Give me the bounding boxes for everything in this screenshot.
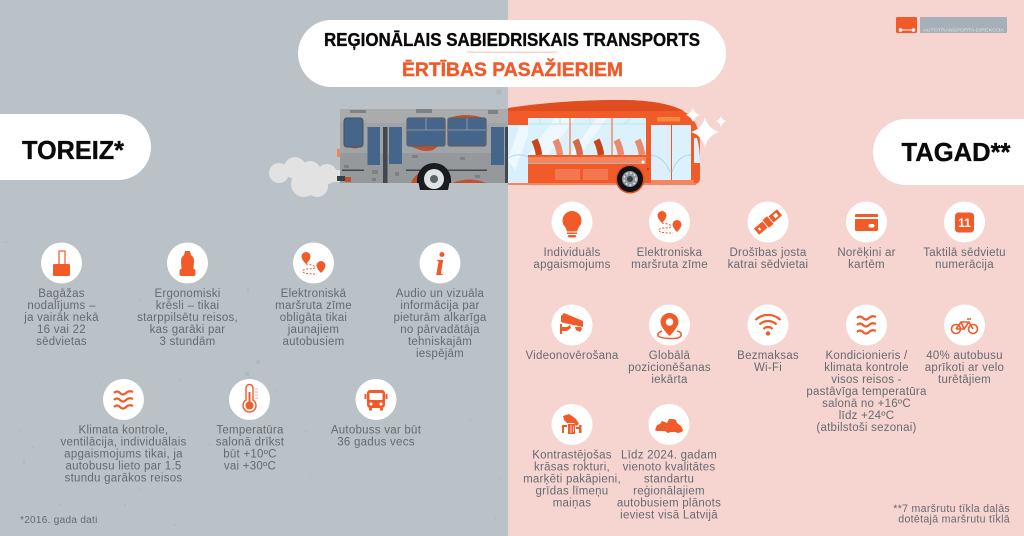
icon: waves bbox=[857, 316, 876, 334]
seats bbox=[534, 140, 642, 155]
item: ergonomic seats: kas garāki par bbox=[150, 324, 225, 336]
item: luggage compartment: sēdvietas bbox=[36, 336, 87, 348]
item: contrast handles: krāsas rokturi, bbox=[534, 462, 610, 474]
item: individual lighting: Individuāls bbox=[543, 247, 601, 259]
item: climate control, past: Klimata kontrole, bbox=[79, 424, 168, 436]
item: air conditioning: līdz +24ºC bbox=[839, 410, 894, 422]
item: climate control, past bbox=[60, 379, 187, 484]
item: electronic route sign, now bbox=[631, 202, 708, 271]
icon: bicycle bbox=[952, 319, 978, 334]
item: Latvia quality standard: ieviest visā Latvijā bbox=[620, 510, 718, 522]
item: audio and visual info: pieturām alkarīga bbox=[393, 312, 487, 324]
item: tactile seat numbering bbox=[923, 202, 1006, 271]
icon: number badge: 11 bbox=[958, 216, 971, 230]
item: video surveillance: Videonovērošana bbox=[525, 350, 619, 362]
item: air conditioning bbox=[806, 304, 927, 434]
item: temperature: vai +30ºC bbox=[224, 460, 276, 472]
icon: info: i bbox=[435, 247, 445, 283]
icon: waves bbox=[114, 391, 133, 408]
icon: bus bbox=[364, 390, 388, 410]
item: electronic route sign, past: autobusiem bbox=[283, 336, 344, 348]
heading pill: TAGAD bbox=[873, 119, 1024, 185]
logo: AUTOTRANSPORTA DIREKCIJA bbox=[923, 28, 1004, 32]
item: video surveillance bbox=[525, 304, 619, 362]
icon: Latvia map bbox=[655, 419, 683, 433]
item: GPS device: Globālā bbox=[649, 350, 690, 362]
item: electronic route sign, now: Elektroniska bbox=[637, 247, 702, 259]
item: luggage compartment: 16 vai 22 bbox=[37, 324, 86, 336]
item: air conditioning: Kondicionieris / bbox=[826, 350, 907, 362]
item: GPS device bbox=[628, 304, 711, 386]
item: Latvia quality standard: Līdz 2024. gadam bbox=[621, 450, 717, 462]
item: temperature: salonā drīkst bbox=[216, 436, 285, 448]
icon: wifi bbox=[756, 315, 780, 336]
item: temperature bbox=[216, 379, 285, 472]
item: audio and visual info: tehniskajām bbox=[408, 336, 472, 348]
icon: bulb bbox=[562, 211, 582, 238]
item: climate control, past: autobusu lieto par 1.5 bbox=[65, 460, 182, 472]
sparkles bbox=[686, 108, 726, 148]
item: individual lighting: apgaismojums bbox=[533, 259, 611, 271]
item: temperature: Temperatūra bbox=[216, 424, 284, 436]
item: bike holders: aprīkoti ar velo bbox=[925, 362, 1004, 374]
icon: card bbox=[855, 214, 878, 231]
item: contrast handles: maiņas bbox=[553, 498, 591, 510]
old grey bus bbox=[337, 109, 508, 190]
item: tactile seat numbering: Taktilā sēdvietu bbox=[923, 247, 1006, 259]
new orange bus bbox=[508, 100, 700, 194]
item: bus age bbox=[331, 379, 422, 448]
item: individual lighting bbox=[533, 202, 611, 271]
item: bike holders bbox=[925, 304, 1004, 386]
item: card payments: Norēķini ar bbox=[837, 247, 896, 259]
icon: route pins bbox=[658, 211, 682, 233]
item: card payments bbox=[837, 202, 896, 271]
item: ergonomic seats: starppilsētu reisos, bbox=[137, 312, 238, 324]
item: contrast handles: marķēti pakāpieni, bbox=[523, 474, 621, 486]
item: GPS device: pozicionēšanas bbox=[628, 362, 711, 374]
panel: right background bbox=[508, 0, 1024, 536]
item: air conditioning: klimata kontrole bbox=[824, 362, 909, 374]
item: air conditioning: pastāvīga temperatūra bbox=[806, 386, 927, 398]
item: bus age: 36 gadus vecs bbox=[337, 436, 415, 448]
footnote: route network: dotētajā maršrutu tīklā bbox=[898, 514, 1010, 526]
exhaust cloud bbox=[269, 157, 340, 197]
logo bbox=[896, 17, 1007, 33]
item: electronic route sign, past: obligāta tikai bbox=[280, 312, 347, 324]
item: climate control, past: ventilācija, individuālais bbox=[60, 436, 187, 448]
item: air conditioning: (atbilstoši sezonai) bbox=[816, 422, 917, 434]
item: electronic route sign, past: maršruta zīme bbox=[275, 300, 352, 312]
item: contrast handles bbox=[523, 404, 621, 510]
icon: suitcase bbox=[53, 251, 70, 276]
item: bike holders: 40% autobusu bbox=[926, 350, 1003, 362]
item: audio and visual info bbox=[393, 242, 487, 360]
item: seat belt: katrai sēdvietai bbox=[728, 259, 808, 271]
item: air conditioning: salonā no +16ºC bbox=[822, 398, 911, 410]
item: bike holders: turētājiem bbox=[938, 374, 991, 386]
item: ergonomic seats bbox=[137, 242, 238, 348]
item: ergonomic seats: Ergonomiski bbox=[154, 288, 221, 300]
item: luggage compartment: ja vairāk nekā bbox=[23, 312, 99, 324]
heading pill: TOREIZ: TOREIZ* bbox=[22, 135, 125, 165]
title: REĢIONĀLAIS SABIEDRISKAIS TRANSPORTS bbox=[324, 30, 700, 50]
item: seat belt: Drošības josta bbox=[729, 247, 807, 259]
footnote: 2016 data: *2016. gada dati bbox=[20, 515, 98, 526]
item: electronic route sign, now: maršruta zīme bbox=[631, 259, 708, 271]
item: free Wi-Fi bbox=[737, 304, 799, 374]
item: luggage compartment: nodalījums – bbox=[27, 300, 96, 312]
item: Latvia quality standard: vienoto kvalitātes bbox=[623, 462, 715, 474]
footnote: route network: **7 maršrutu tīkla daļās bbox=[893, 503, 1010, 515]
item: card payments: kartēm bbox=[848, 259, 885, 271]
item: free Wi-Fi: Bezmaksas bbox=[737, 350, 799, 362]
subtitle: ĒRTĪBAS PASAŽIERIEM bbox=[402, 57, 623, 81]
item: audio and visual info: informācija par bbox=[400, 300, 480, 312]
item: contrast handles: Kontrastējošas bbox=[532, 450, 612, 462]
icon: camera bbox=[560, 313, 583, 334]
item: Latvia quality standard: reģionālajiem bbox=[633, 484, 705, 498]
panel: left background bbox=[0, 0, 508, 536]
item: luggage compartment bbox=[23, 242, 99, 348]
item: air conditioning: visos reisos - bbox=[831, 374, 902, 386]
item: electronic route sign, past bbox=[275, 242, 352, 348]
icon: seat belt bbox=[753, 209, 783, 235]
item: ergonomic seats: krēsli – tikai bbox=[156, 300, 219, 312]
item: bus age: Autobuss var būt bbox=[331, 424, 421, 436]
icon: seat bbox=[180, 251, 196, 276]
item: electronic route sign, past: jaunajiem bbox=[287, 324, 339, 336]
item: temperature: būt +10ºC bbox=[223, 448, 277, 460]
item: electronic route sign, past: Elektroniskā bbox=[281, 288, 346, 300]
item: audio and visual info: no pārvadātāja bbox=[400, 324, 480, 336]
item: audio and visual info: iespējām bbox=[416, 348, 464, 360]
item: tactile seat numbering: numerācija bbox=[935, 259, 994, 271]
icon: location pin bbox=[658, 313, 681, 339]
item: audio and visual info: Audio un vizuāla bbox=[396, 288, 484, 300]
icon: route pins bbox=[302, 252, 326, 274]
item: ergonomic seats: 3 stundām bbox=[160, 336, 215, 348]
icon: handles bbox=[562, 414, 582, 434]
item: Latvia quality standard: autobusiem plānots bbox=[617, 498, 721, 510]
heading pill: TOREIZ bbox=[0, 114, 151, 180]
item: GPS device: iekārta bbox=[651, 374, 688, 386]
title pill bbox=[298, 20, 726, 87]
item: contrast handles: grīdas līmeņu bbox=[536, 486, 608, 498]
item: climate control, past: apgaismojums tikai, ja bbox=[64, 448, 183, 460]
icon: thermometer bbox=[243, 384, 258, 412]
item: luggage compartment: Bagāžas bbox=[38, 288, 85, 300]
item: Latvia quality standard: standartu bbox=[644, 474, 694, 486]
heading pill: TAGAD: TAGAD** bbox=[902, 137, 1011, 167]
item: climate control, past: stundu garākos reisos bbox=[65, 472, 182, 484]
item: free Wi-Fi: Wi-Fi bbox=[754, 362, 782, 374]
item: seat belt bbox=[728, 202, 808, 271]
item: Latvia quality standard bbox=[617, 404, 721, 522]
